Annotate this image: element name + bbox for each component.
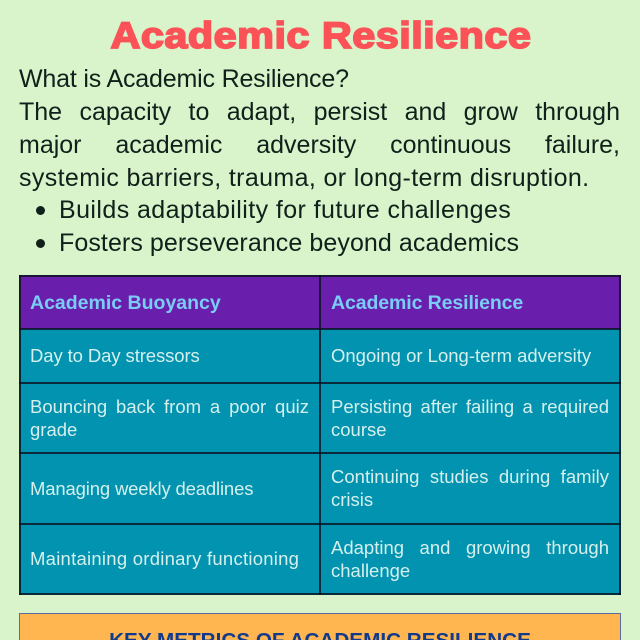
row 2 left [19,383,320,453]
definition line 2: major academic adversity continuous failure, [19,131,620,159]
bullet list [36,196,519,257]
row 4 right [320,524,621,595]
row 3 right: crisis [331,489,373,510]
row 3 left: Managing weekly deadlines [30,478,253,499]
header cell: Academic Resilience [320,275,621,329]
row 1 left: Day to Day stressors [30,345,200,366]
row 2 left: Bouncing back from a poor quiz [30,396,309,417]
header cell: Academic Buoyancy [19,275,320,329]
panel: key metrics [19,613,621,640]
header cell: Academic Buoyancy: Academic Buoyancy [30,292,221,314]
bullet 1: Builds adaptability for future challenges [59,196,511,224]
definition line 3: systemic barriers, trauma, or long-term disruption. [19,164,589,192]
text block: definition [19,65,620,192]
row 2 right [320,383,621,453]
row 4 left [19,524,320,595]
header cell: Academic Resilience: Academic Resilience [331,292,523,314]
definition line 1: The capacity to adapt, persist and grow through [19,98,620,126]
row 3 right [320,453,621,524]
question heading: What is Academic Resilience? [19,65,349,93]
row 4 right: challenge [331,560,410,581]
row 2 left: grade [30,419,77,440]
row 2 right: Persisting after failing a required [331,396,609,417]
row 4 right: Adapting and growing through [331,537,609,558]
row 1 left [19,329,320,383]
row 4 left: Maintaining ordinary functioning [30,548,299,569]
row 1 right: Ongoing or Long-term adversity [331,345,591,366]
row 3 left [19,453,320,524]
row 2 right: course [331,419,387,440]
comparison table [19,275,621,595]
bullet 2: Fosters perseverance beyond academics [59,229,519,257]
row 1 right [320,329,621,383]
row 3 right: Continuing studies during family [331,466,609,487]
title: Academic Resilience [111,15,531,56]
